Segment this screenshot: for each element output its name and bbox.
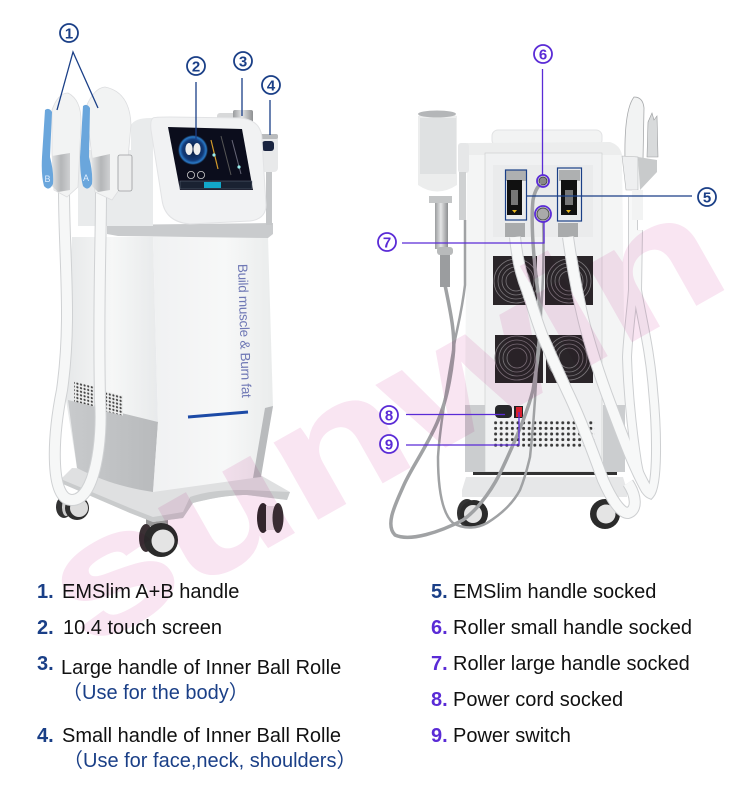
item 6: 6.	[431, 617, 448, 639]
blue light bar	[188, 412, 248, 417]
EMSlim sockets	[505, 170, 580, 237]
callout 7: 7	[383, 234, 391, 252]
top cap	[492, 130, 602, 146]
item 1: EMSlim A+B handle	[62, 581, 239, 603]
callout 2	[187, 57, 205, 140]
left machine: front view	[42, 87, 290, 557]
callout 2: 2	[192, 58, 200, 76]
item 4	[37, 725, 356, 772]
item 3: 3.	[37, 653, 54, 675]
small roller handle	[458, 143, 469, 220]
item 3	[37, 653, 341, 704]
item 9: Power switch	[453, 725, 571, 747]
side vents	[74, 381, 123, 416]
front gray sliver	[253, 406, 273, 478]
legend: left column	[37, 581, 356, 772]
callout 7	[378, 206, 551, 252]
handle tubes forming loop	[55, 190, 101, 500]
EMSlim handle B: B	[44, 174, 51, 184]
callout 6: 6	[539, 46, 547, 64]
item 3: Large handle of Inner Ball Rolle	[61, 657, 341, 679]
cooling fans	[493, 256, 593, 383]
rear EMSlim handle	[622, 97, 658, 220]
rear side of cabinet	[66, 237, 158, 490]
front panel	[153, 237, 273, 492]
callout 9	[380, 412, 519, 454]
callout 9: 9	[385, 436, 393, 454]
power switch	[514, 406, 523, 418]
legend: right column	[431, 581, 692, 747]
item 7: Roller large handle socked	[453, 653, 690, 675]
item 8: Power cord socked	[453, 689, 623, 711]
right machine: rear view	[391, 97, 658, 537]
callout 5: 5	[703, 190, 711, 206]
item 2: 10.4 touch screen	[63, 617, 222, 639]
rear casters	[457, 499, 620, 529]
watermark: sunwin	[13, 153, 750, 680]
EMSlim handle B	[42, 93, 81, 197]
roller sockets	[537, 177, 549, 220]
callout 5	[506, 168, 716, 221]
head front shell	[151, 117, 266, 224]
item 3: （Use for the body）	[62, 681, 249, 704]
item 4: （Use for face,neck, shoulders）	[63, 749, 356, 772]
shelf	[107, 223, 273, 238]
item 4: Small handle of Inner Ball Rolle	[62, 725, 341, 747]
item 6: Roller small handle socked	[453, 617, 692, 639]
callout 3	[234, 52, 252, 116]
callout 4	[262, 76, 280, 135]
item 1: 1.	[37, 581, 54, 603]
large roller handle	[418, 110, 457, 287]
power cord socket	[495, 405, 512, 418]
callout 8	[380, 406, 505, 424]
callout 4: 4	[267, 78, 276, 94]
item 2: 2.	[37, 617, 54, 639]
white EMSlim tubes	[515, 197, 656, 513]
callout 3: 3	[239, 54, 247, 70]
item 4: 4.	[37, 725, 54, 747]
small handle (item 4)	[260, 134, 278, 225]
callout 8: 8	[385, 408, 393, 424]
rear vent grille	[494, 421, 595, 449]
callout 1: 1	[65, 26, 73, 42]
large roller head on top (item 3)	[217, 110, 253, 124]
item 5: 5.	[431, 581, 448, 603]
side gray skirt	[68, 400, 158, 492]
callout 1	[57, 24, 98, 110]
rear head block	[78, 118, 153, 226]
item 8: 8.	[431, 689, 448, 711]
vertical slogan: Build muscle & Burn fat	[235, 264, 254, 398]
callout 6	[534, 45, 552, 187]
rear base	[462, 477, 627, 497]
touch screen	[168, 127, 253, 190]
base with casters	[56, 468, 290, 557]
gray roller cables	[391, 184, 544, 537]
item 7: 7.	[431, 653, 448, 675]
EMSlim handle A: A	[83, 173, 89, 183]
item 5: EMSlim handle socked	[453, 581, 656, 603]
item 9: 9.	[431, 725, 448, 747]
rear cabinet body	[465, 142, 625, 475]
EMSlim handle A	[80, 87, 132, 200]
